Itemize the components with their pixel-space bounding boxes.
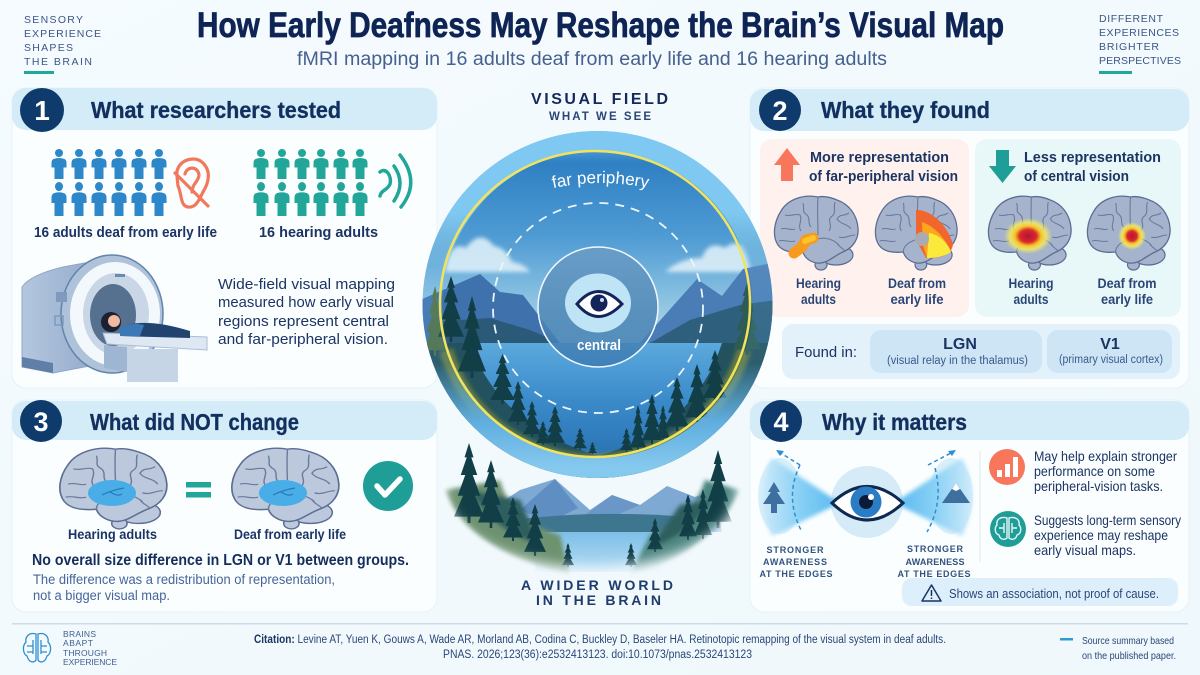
icon: crossed-out ear bbox=[175, 159, 208, 207]
LGN chip bbox=[870, 330, 1042, 373]
label: central: central bbox=[577, 338, 621, 354]
labels bbox=[1008, 276, 1156, 307]
labels: early life bbox=[890, 292, 944, 307]
icon: up arrow bbox=[774, 148, 800, 181]
far mountains bbox=[420, 274, 560, 343]
footer bbox=[12, 623, 1188, 667]
heading: What researchers tested bbox=[91, 97, 341, 123]
footer tagline bbox=[63, 629, 117, 667]
small lake bbox=[535, 532, 660, 572]
finding heading: Less representation bbox=[1024, 149, 1161, 166]
illustration: MRI scanner with patient bbox=[22, 255, 207, 382]
key statement: No overall size difference in LGN or V1 between groups. bbox=[32, 552, 409, 569]
heading: Why it matters bbox=[822, 409, 967, 435]
header bar bbox=[12, 401, 437, 440]
text: sensory implication: experience may reshape bbox=[1034, 527, 1168, 543]
shoreline bbox=[420, 343, 776, 480]
icon: tree bbox=[763, 482, 785, 513]
card bbox=[12, 88, 437, 388]
body text: regions represent central bbox=[218, 313, 389, 330]
center caption: a wider world in the brain: A WIDER WORLD bbox=[521, 577, 673, 593]
text: sensory implication: early visual maps. bbox=[1034, 542, 1136, 558]
number badge 3: 3 bbox=[33, 407, 49, 437]
pine trees bbox=[424, 276, 761, 454]
label: left edge: AWARENESS bbox=[763, 557, 827, 567]
mountains bbox=[490, 479, 722, 532]
finding heading: of far-peripheral vision bbox=[809, 168, 958, 185]
pictogram: 16 deaf adults bbox=[52, 149, 166, 216]
body text: measured how early visual bbox=[218, 294, 394, 311]
field boundary arrows bbox=[779, 452, 953, 532]
right tagline: PERSPECTIVES bbox=[1099, 55, 1181, 67]
panel 1: what researchers tested bbox=[12, 88, 437, 388]
right tagline: EXPERIENCES bbox=[1099, 27, 1179, 39]
supporting text: The difference was a redistribution of representation, bbox=[33, 572, 335, 587]
sky bbox=[420, 130, 776, 344]
labels: adults bbox=[1014, 292, 1048, 307]
labels: Deaf from bbox=[888, 276, 946, 291]
text: performance implication: performance on some bbox=[1034, 463, 1155, 479]
label: right edge: AWARENESS bbox=[906, 557, 964, 567]
number badge 4: 4 bbox=[773, 407, 789, 437]
lake bbox=[420, 343, 776, 479]
illustration: lower landscape bbox=[445, 443, 740, 575]
left tagline: SHAPES bbox=[24, 42, 73, 54]
header bar bbox=[12, 88, 437, 130]
foliage bbox=[445, 480, 740, 575]
label: far periphery: far periphery bbox=[552, 170, 650, 190]
callout: association caveat bbox=[902, 578, 1178, 606]
center heading: visual field: WHAT WE SEE bbox=[549, 111, 651, 123]
pictogram: 16 hearing adults bbox=[254, 149, 368, 216]
icon: brain badge bbox=[990, 511, 1026, 547]
icon: mountain bbox=[942, 483, 970, 503]
body text: Wide-field visual mapping bbox=[218, 276, 395, 293]
illustration: visual field circle bbox=[422, 131, 772, 478]
header bar bbox=[750, 401, 1189, 440]
equals sign bbox=[186, 482, 211, 498]
panel 2: what they found bbox=[750, 88, 1189, 388]
body text bbox=[218, 276, 395, 348]
footer tagline: BRAINS bbox=[63, 629, 96, 639]
finding heading bbox=[1024, 149, 1161, 185]
brain: deaf from early life bbox=[232, 448, 339, 529]
label: right edge: AT THE EDGES bbox=[898, 569, 970, 579]
labels: Deaf from bbox=[1098, 276, 1156, 291]
left tagline: THE BRAIN bbox=[24, 56, 92, 68]
V1 chip: V1 bbox=[1100, 336, 1120, 353]
found-in strip bbox=[782, 324, 1180, 379]
finding heading: of central vision bbox=[1024, 168, 1129, 185]
dashed mid-field ring bbox=[493, 203, 703, 413]
right tagline bbox=[1099, 13, 1181, 74]
left tagline bbox=[24, 14, 101, 74]
supporting text: not a bigger visual map. bbox=[33, 588, 170, 603]
panel 4: why it matters bbox=[750, 400, 1189, 612]
label: right edge bbox=[898, 544, 970, 579]
icon: eye bbox=[577, 292, 622, 316]
labels: Hearing bbox=[796, 276, 841, 291]
icon: footer brain bbox=[23, 634, 51, 662]
subtitle: fMRI mapping in 16 adults deaf from early life and 16 hearing adults bbox=[297, 49, 887, 70]
text: performance implication: May help explain stronger bbox=[1034, 448, 1177, 464]
number badge 4 bbox=[760, 400, 802, 442]
label: left edge: AT THE EDGES bbox=[760, 569, 832, 579]
source note: Source summary based bbox=[1082, 635, 1174, 647]
central zone bbox=[538, 247, 658, 367]
brain: deaf, large peripheral activation bbox=[875, 196, 957, 270]
LGN chip: (visual relay in the thalamus) bbox=[887, 355, 1028, 367]
number badge 1: 1 bbox=[34, 95, 50, 126]
footer tagline: EXPERIENCE bbox=[63, 657, 117, 667]
heading: What they found bbox=[821, 97, 990, 123]
V1 chip: (primary visual cortex) bbox=[1059, 354, 1163, 366]
citation bbox=[254, 634, 946, 661]
icon: bar chart badge bbox=[989, 449, 1025, 485]
number badge 2 bbox=[759, 89, 801, 131]
right tagline: BRIGHTER bbox=[1099, 41, 1159, 53]
label: right edge: STRONGER bbox=[907, 544, 964, 554]
labels bbox=[796, 276, 946, 307]
footer tagline: THROUGH bbox=[63, 648, 107, 658]
LGN chip: LGN bbox=[943, 336, 977, 353]
panel 3: what did not change bbox=[12, 400, 437, 612]
arrowheads bbox=[776, 450, 956, 456]
label: deaf group: 16 adults deaf from early life bbox=[34, 225, 217, 241]
brain: hearing adults bbox=[60, 448, 167, 529]
footer tagline: ABAPT bbox=[63, 638, 93, 648]
supporting text bbox=[33, 572, 335, 603]
check mark badge bbox=[363, 461, 413, 511]
brain: deaf, small central activation bbox=[1087, 196, 1170, 270]
subpanel: more far-peripheral bbox=[760, 139, 969, 317]
label: deaf from early life: Deaf from early life bbox=[234, 527, 346, 542]
body text: and far-peripheral vision. bbox=[218, 331, 388, 348]
center caption: a wider world in the brain bbox=[521, 577, 673, 608]
right tagline: DIFFERENT bbox=[1099, 13, 1164, 25]
label: left edge bbox=[760, 545, 832, 579]
text: performance implication: peripheral-vision tasks. bbox=[1034, 478, 1163, 494]
citation: PNAS. 2026;123(36):e2532413123. doi:10.1073/pnas.2532413123 bbox=[443, 649, 752, 661]
labels: adults bbox=[801, 292, 836, 307]
number badge 3 bbox=[20, 400, 62, 442]
card bbox=[750, 400, 1189, 612]
pines bbox=[454, 443, 732, 567]
found-in strip: Found in: bbox=[795, 344, 857, 361]
diagram: eye with widened field bbox=[758, 450, 973, 538]
left tagline: SENSORY bbox=[24, 14, 83, 26]
text: sensory implication bbox=[1034, 512, 1181, 558]
card bbox=[750, 88, 1189, 388]
callout: association caveat: Shows an association, not proof of cause. bbox=[949, 586, 1159, 601]
label: hearing group: 16 hearing adults bbox=[259, 225, 378, 241]
header bar bbox=[750, 89, 1189, 131]
clouds bbox=[445, 237, 750, 272]
labels: Hearing bbox=[1008, 276, 1054, 291]
subpanel: less central bbox=[975, 139, 1181, 317]
label: left edge: STRONGER bbox=[766, 545, 824, 555]
source note: on the published paper. bbox=[1082, 650, 1176, 662]
labels: early life bbox=[1101, 292, 1153, 307]
finding heading bbox=[809, 149, 958, 185]
brain: hearing, large central activation bbox=[988, 196, 1071, 270]
dark forested hills bbox=[430, 318, 560, 343]
card bbox=[12, 400, 437, 612]
finding heading: More representation bbox=[810, 149, 949, 166]
heading: What did NOT change bbox=[90, 409, 299, 435]
citation: Citation: Levine AT, Yuen K, Gouws A, Wade AR, Morland AB, Codina C, Buckley D, Baseler HA. Retinotopic remapping of the visual system in deaf adults. bbox=[254, 634, 946, 646]
left tagline: EXPERIENCE bbox=[24, 28, 101, 40]
icon: hearing ear with sound waves bbox=[380, 155, 411, 207]
V1 chip bbox=[1047, 330, 1172, 373]
source note bbox=[1060, 635, 1176, 662]
number badge 1 bbox=[20, 88, 64, 132]
text: performance implication bbox=[1034, 448, 1177, 494]
center caption: a wider world in the brain: IN THE BRAIN bbox=[536, 592, 661, 608]
center heading: visual field bbox=[531, 91, 668, 123]
yellow boundary ring bbox=[440, 151, 750, 457]
label: hearing adults: Hearing adults bbox=[68, 527, 157, 542]
icon: down arrow bbox=[989, 150, 1016, 183]
title: How Early Deafness May Reshape the Brain’s Visual Map bbox=[197, 6, 1004, 45]
number badge 2: 2 bbox=[772, 96, 788, 126]
center heading: visual field: VISUAL FIELD bbox=[531, 91, 668, 108]
outer ring bbox=[432, 141, 762, 468]
brain: hearing, small peripheral activation bbox=[774, 196, 858, 270]
